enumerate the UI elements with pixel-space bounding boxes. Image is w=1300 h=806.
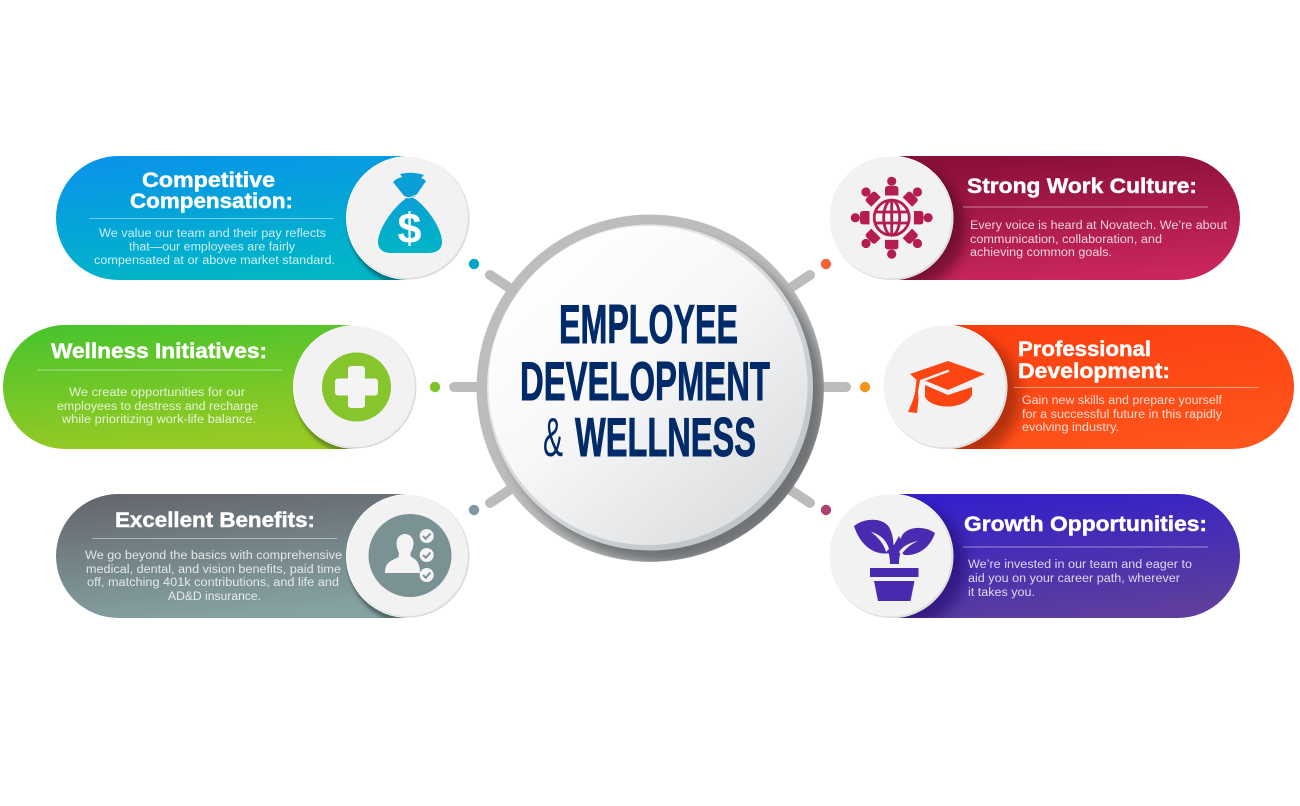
body text: it takes you. [968, 587, 1035, 599]
body text: We value our team and their pay reflects [99, 228, 326, 240]
panel: professional development [882, 324, 1294, 460]
icon: money bag [346, 156, 470, 280]
body text: communication, collaboration, and [970, 234, 1162, 246]
heading: Competitive [142, 169, 275, 192]
centre title: & [543, 406, 563, 468]
body text: employees to destress and recharge [57, 401, 258, 413]
heading: Wellness Initiatives: [51, 340, 267, 363]
body text: for a successful future in this rapidly [1022, 409, 1222, 421]
panel: strong work culture [828, 156, 1240, 291]
panel: wellness initiatives [3, 325, 419, 455]
body text: Gain new skills and prepare yourself [1022, 395, 1223, 407]
icon: money bag: $ [398, 205, 422, 253]
body text: medical, dental, and vision benefits, paid time [86, 564, 341, 576]
body text: We’re invested in our team and eager to [968, 559, 1192, 571]
icon: graduation cap [882, 324, 1008, 450]
panel: growth opportunities [828, 494, 1240, 629]
connector dots [430, 259, 870, 515]
centre title: EMPLOYEE [559, 293, 738, 355]
heading [1018, 338, 1170, 383]
heading: Professional [1018, 338, 1151, 361]
heading: Strong Work Culture: [967, 175, 1197, 198]
heading: Excellent Benefits: [115, 509, 315, 532]
body text: Every voice is heard at Novatech. We’re about [970, 220, 1228, 232]
centre badge [476, 214, 825, 563]
heading: Development: [1018, 360, 1170, 383]
icon: medical cross [293, 325, 417, 449]
centre title [520, 293, 770, 468]
body text: We go beyond the basics with comprehensive [85, 550, 342, 562]
icon: person with checklist [346, 494, 470, 618]
panel: competitive compensation [56, 156, 472, 286]
connector spokes [454, 275, 846, 503]
body text: that—our employees are fairly [129, 242, 295, 254]
centre title: DEVELOPMENT [520, 350, 770, 412]
body text [85, 550, 342, 603]
icon: potted plant [828, 494, 954, 618]
heading: Compensation: [130, 190, 293, 213]
body text: achieving common goals. [970, 247, 1112, 259]
body text: aid you on your career path, wherever [968, 573, 1180, 585]
heading [130, 169, 293, 213]
body text [57, 387, 258, 426]
body text: off, matching 401k contributions, and life and [87, 577, 339, 589]
body text [968, 559, 1192, 599]
body text: while prioritizing work-life balance. [61, 414, 256, 426]
body text: We create opportunities for our [69, 387, 245, 399]
body text [970, 220, 1228, 259]
body text: evolving industry. [1022, 422, 1119, 434]
body text [1022, 395, 1223, 434]
heading: Growth Opportunities: [964, 513, 1207, 536]
body text: compensated at or above market standard. [94, 255, 335, 267]
icon: people around globe [828, 156, 954, 280]
body text [94, 228, 335, 267]
body text: AD&D insurance. [168, 591, 261, 603]
centre title: WELLNESS [575, 406, 756, 468]
panel: excellent benefits [56, 494, 472, 624]
